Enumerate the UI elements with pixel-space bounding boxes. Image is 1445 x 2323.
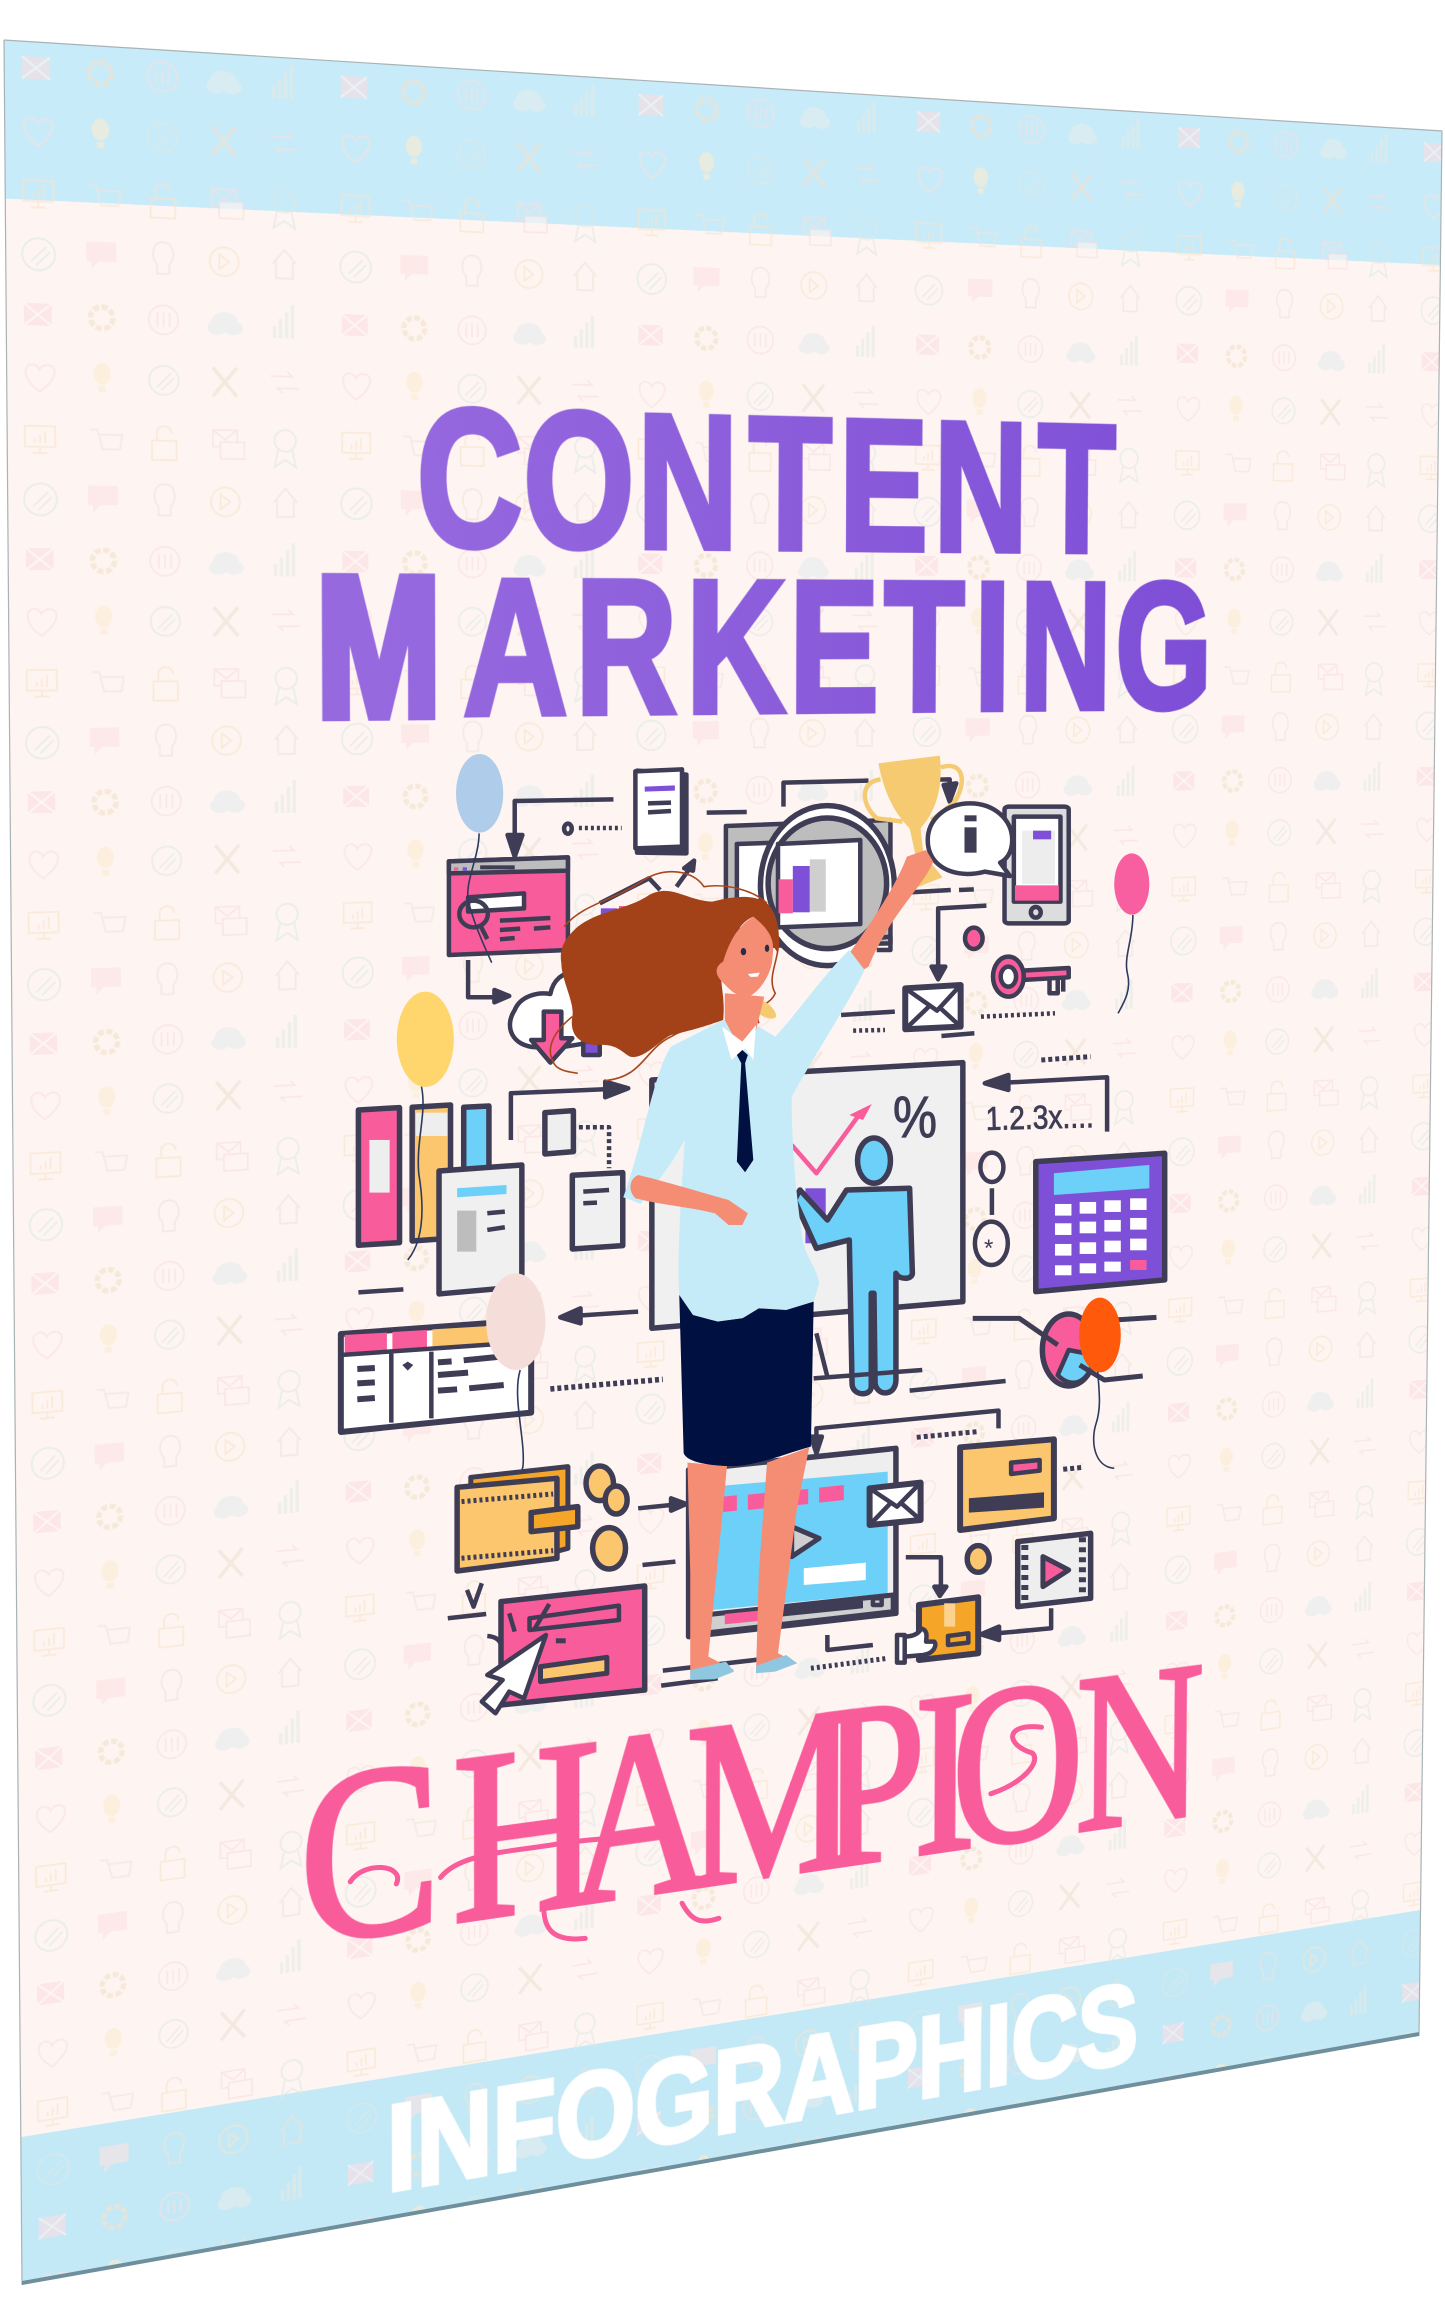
upper illustration group xyxy=(358,754,1165,1394)
magnifier over chart xyxy=(760,806,894,966)
small square and dotted connector xyxy=(545,1111,609,1168)
hair strands xyxy=(550,872,778,1081)
video window xyxy=(689,1448,896,1637)
asterisk text: * xyxy=(984,1235,993,1262)
lines near feet xyxy=(661,1635,888,1686)
arrow left to calendar xyxy=(560,1308,638,1323)
board labels xyxy=(893,1085,1094,1262)
arrow to board left xyxy=(511,1082,628,1140)
bottom thickness edge xyxy=(22,2032,1419,2285)
pie chart xyxy=(973,1314,1156,1386)
browser window icon xyxy=(449,857,568,955)
dotted lines near card xyxy=(917,1432,1084,1469)
skirt xyxy=(679,1295,814,1466)
raised arm xyxy=(849,850,933,970)
small lines near envelope xyxy=(841,1012,1055,1036)
title: content: CONTENT xyxy=(438,385,1275,675)
arrow to video window xyxy=(811,1411,998,1453)
top blue band xyxy=(4,40,1442,265)
presenter figure xyxy=(794,1138,912,1394)
arrow to envelope xyxy=(932,906,986,979)
pink dot xyxy=(965,928,983,949)
woman figure xyxy=(550,850,933,1322)
dash under sheet xyxy=(358,1289,403,1292)
dotted connector xyxy=(564,824,622,834)
dotted line upper right xyxy=(1041,1057,1091,1060)
champion swashes xyxy=(350,1727,1042,1939)
pink balloon xyxy=(1114,853,1149,1013)
woman lower body xyxy=(679,1295,814,1680)
arrow to box from video xyxy=(981,1608,1051,1640)
collar xyxy=(722,1025,756,1060)
checklist node icons xyxy=(975,1153,1008,1265)
facial features xyxy=(741,945,769,977)
right shoe xyxy=(756,1655,797,1673)
tablet xyxy=(1005,807,1069,923)
video icon xyxy=(1018,1533,1091,1607)
short dash xyxy=(707,810,747,815)
title: marketing: MARKETING xyxy=(329,558,1405,866)
hair xyxy=(561,891,779,1057)
percent text: % xyxy=(893,1085,937,1150)
dashes under trophy xyxy=(910,889,974,892)
arrow to board xyxy=(985,1075,1107,1132)
trophy xyxy=(865,756,962,890)
title: champion: CHAMPION xyxy=(316,1820,1417,2194)
shirt xyxy=(623,950,865,1322)
coins xyxy=(586,1466,627,1569)
dotted line under board xyxy=(550,1379,663,1389)
envelope icon xyxy=(905,985,961,1029)
check mark and dash xyxy=(448,1583,486,1618)
document icon xyxy=(635,769,686,853)
yellow balloon xyxy=(397,992,454,1260)
legs xyxy=(687,1447,809,1678)
forearm xyxy=(630,1175,748,1225)
pink web form xyxy=(487,1586,645,1705)
wallet xyxy=(457,1467,578,1571)
pale balloon xyxy=(486,1273,545,1545)
lines beside skirt xyxy=(814,1333,1006,1391)
parcel box with thumb xyxy=(897,1597,978,1663)
arrow from coins xyxy=(638,1498,686,1565)
calendar table xyxy=(341,1320,531,1432)
subtitle: infographics: INFOGRAPHICS xyxy=(415,2232,1335,2285)
left shoe xyxy=(690,1662,734,1680)
lower illustration group xyxy=(341,1273,1156,1713)
info speech bubble xyxy=(928,803,1012,876)
blue balloon xyxy=(456,754,503,963)
book stack xyxy=(358,1105,489,1245)
step numbers text: 1.2.3x.... xyxy=(985,1097,1094,1137)
mouse cursor xyxy=(482,1635,546,1713)
cloud download icon xyxy=(510,970,605,1063)
credit card xyxy=(960,1439,1054,1530)
neck and face xyxy=(717,917,773,1048)
small coin xyxy=(967,1546,989,1572)
orange balloon xyxy=(1079,1298,1121,1468)
laptop with chart xyxy=(726,820,890,947)
key icon xyxy=(993,957,1069,997)
hair curl at neck xyxy=(753,997,776,1019)
arrow to browser window xyxy=(508,799,613,857)
bottom blue band xyxy=(21,1910,1421,2285)
envelope on video window xyxy=(870,1483,921,1525)
arrow over trophy xyxy=(783,779,956,807)
small sheet xyxy=(572,1173,623,1249)
arrow to cloud xyxy=(468,960,509,1002)
arrow to box xyxy=(906,1557,946,1596)
report sheet xyxy=(439,1165,522,1294)
calculator xyxy=(1036,1153,1165,1292)
presentation board xyxy=(652,1063,963,1328)
growth arrows behind hair xyxy=(600,861,694,915)
necktie xyxy=(737,1050,753,1172)
